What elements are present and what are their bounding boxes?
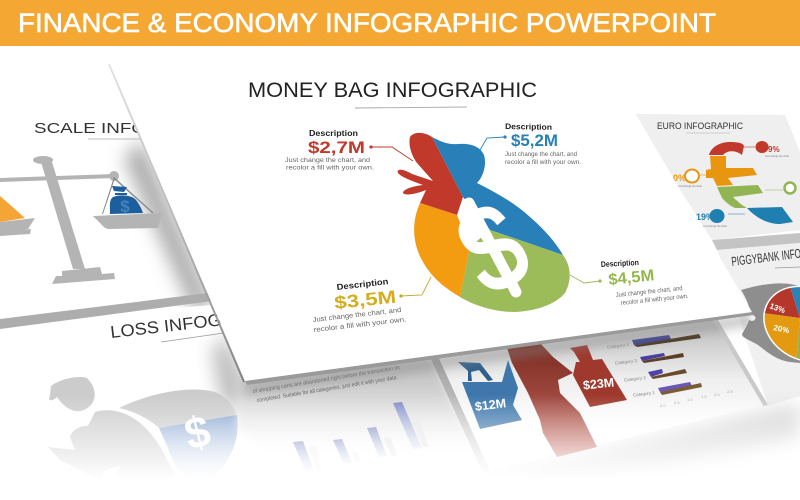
- icon: piggy bank: [741, 283, 800, 363]
- icon: blue shopping bag: $12M: [474, 396, 507, 414]
- icon: blue shopping bag: [458, 360, 522, 429]
- callout: gold value: [312, 276, 431, 334]
- callout: green value: Just change the chart, and: [615, 285, 683, 299]
- callout: gold value: Description: [336, 276, 389, 292]
- bar chart: categories: 1.5: [701, 394, 707, 399]
- callout: green value: $4,5M: [608, 267, 655, 289]
- bar chart: categories: Category 4: [607, 342, 630, 350]
- icon: red shopping bag: [570, 345, 627, 407]
- callout: euro blue: 19%: [696, 212, 714, 222]
- callout: euro orange: 0%: [673, 173, 686, 183]
- bag slice: orange: [414, 203, 470, 297]
- callout: blue value: [480, 122, 581, 166]
- icon: piggy bank: 13%: [768, 301, 786, 315]
- callout: euro red: [744, 141, 789, 158]
- heading: euro: EURO INFOGRAPHIC: [657, 121, 743, 131]
- callout: green value: [570, 258, 689, 307]
- icon: man silhouette: [48, 377, 180, 490]
- callout: euro orange: [673, 170, 706, 188]
- panel: loss slide: $: [180, 406, 215, 460]
- panel: money bag slide: [110, 60, 752, 381]
- callout: gold value: Just change the chart, and: [312, 307, 402, 324]
- callout: euro blue: [696, 209, 745, 228]
- callout: euro orange: Just change the chart: [678, 185, 702, 188]
- bar chart: columns: [293, 402, 429, 472]
- panel: piggybank slide: [712, 233, 800, 406]
- icon: red shopping bag: $23M: [582, 375, 615, 393]
- icon: balance scale: [0, 156, 163, 284]
- bar chart: categories: 2.0: [714, 392, 720, 397]
- callout: euro green: [765, 182, 796, 194]
- callout: red value: recolor a fill with your own.: [286, 164, 374, 172]
- panel: shopping slide: [430, 320, 800, 500]
- icon: small money bag: $: [120, 197, 130, 216]
- bar chart: categories: 1.0: [687, 397, 693, 402]
- icon: red woman silhouette: [507, 343, 597, 457]
- pie chart: [764, 287, 800, 360]
- panel: grey edge band: [0, 293, 212, 329]
- callout: euro red: 9%: [768, 145, 780, 154]
- panel: euro slide: [632, 114, 800, 240]
- callout: red value: Description: [309, 129, 358, 138]
- callout: red value: [285, 129, 413, 172]
- callout: red value: $2,7M: [308, 138, 365, 157]
- icon: euro symbol: [706, 142, 793, 224]
- heading: scale: SCALE INFO: [34, 121, 146, 137]
- callout: blue value: Description: [505, 122, 552, 132]
- panel: column chart slide: [238, 352, 486, 472]
- heading: money bag: MONEY BAG INFOGRAPHIC: [248, 79, 537, 102]
- icon: loss money bag: [119, 389, 237, 428]
- callout: blue value: Just change the chart, and: [505, 151, 577, 158]
- callout: gold value: recolor a fill with your own.: [313, 316, 407, 334]
- callout: blue value: recolor a fill with your own.: [505, 159, 581, 166]
- icon: dollar sign: $: [437, 176, 549, 321]
- header banner: [0, 0, 800, 46]
- bar chart: categories: 0.5: [674, 400, 680, 405]
- heading: loss: LOSS INFOG: [109, 310, 223, 342]
- bag slice: green: [460, 230, 570, 312]
- panel: loss slide: [48, 314, 243, 466]
- callout: red value: Just change the chart, and: [285, 157, 370, 164]
- icon: gold bricks: [0, 196, 25, 222]
- icon: small money bag: [110, 186, 143, 216]
- panel: scale slide: [0, 121, 214, 310]
- icon: money bag: [398, 133, 570, 321]
- bottom fade: [0, 395, 800, 480]
- bar chart: categories: Category 3: [615, 358, 638, 366]
- text block: column chart: completed. Suitable for all categories, just edit it with your data.: [256, 375, 399, 404]
- bar chart: categories: 2.5: [727, 389, 733, 394]
- callout: euro blue: Just change the chart: [703, 225, 727, 228]
- callout: blue value: $5,2M: [511, 132, 558, 150]
- callout: gold value: $3,5M: [333, 287, 397, 313]
- callout: green value: recolor a fill with your own.: [620, 293, 689, 307]
- bag slice: red: [398, 133, 463, 215]
- bar chart: categories: Category 1: [633, 390, 656, 398]
- icon: piggy bank: 20%: [773, 323, 790, 335]
- bag slice: blue: [432, 137, 563, 255]
- bar chart: categories: 0.0: [660, 403, 666, 408]
- panel: main slide shadow: [109, 64, 754, 396]
- callout: green value: Description: [601, 258, 639, 269]
- text block: column chart: of shopping carts are abandoned right before the transaction its: [252, 365, 401, 395]
- bar chart: categories: Category 2: [624, 375, 647, 383]
- title: FINANCE & ECONOMY INFOGRAPHIC POWERPOINT: [18, 8, 716, 38]
- bar chart: categories: [607, 334, 733, 408]
- callout: euro red: Just change the chart: [765, 155, 789, 158]
